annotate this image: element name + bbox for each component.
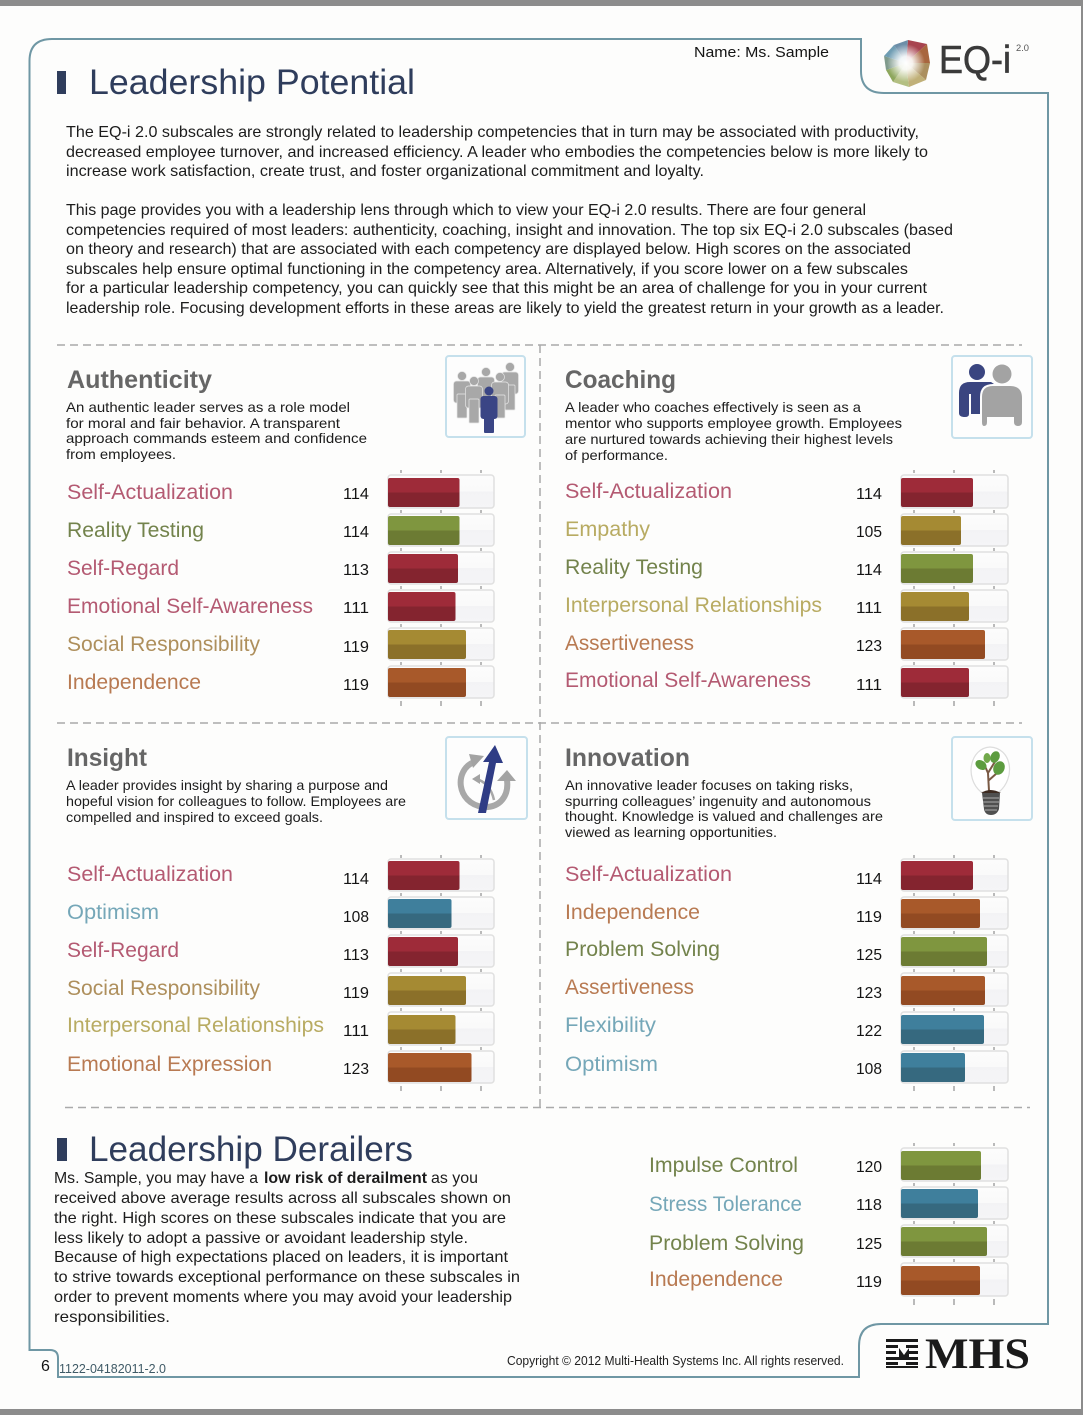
row: Emotional Self-Awareness 111: Emotional Self-Awareness (67, 595, 313, 618)
panel: Innovation (565, 737, 1032, 1091)
row: Emotional Self-Awareness 111 (67, 586, 494, 622)
row: Assertiveness 123: Assertiveness (565, 632, 694, 655)
row: Social Responsibility 119 (67, 969, 494, 1006)
row: Self-Actualization 114 (565, 470, 1008, 508)
row: Interpersonal Relationships 111: Interpersonal Relationships (565, 594, 822, 617)
intro paragraph 2: on theory and research) that are associated with each competency are displayed below. High scores on the associated (66, 241, 911, 258)
row: Emotional Self-Awareness 111: Emotional Self-Awareness (565, 669, 811, 692)
row: Optimism 108 (565, 1047, 1008, 1091)
panel: Coaching (565, 356, 1032, 706)
description: Coaching: A leader who coaches effectively is seen as a (565, 399, 861, 415)
description: Insight (66, 777, 406, 825)
row: Self-Actualization 114 (565, 855, 1008, 891)
row: Social Responsibility 119 (67, 624, 494, 660)
row: Stress Tolerance 118 (649, 1183, 1008, 1219)
row: Problem Solving 125: 125 (856, 1236, 882, 1253)
logo: EQ-i 2.0 (884, 39, 1029, 87)
row: Problem Solving 125: 125 (856, 947, 882, 964)
row: Social Responsibility 119: Social Responsibility (67, 977, 260, 1000)
row: Emotional Self-Awareness 111 (565, 662, 1008, 706)
intro paragraph 1 (66, 124, 928, 180)
row: Stress Tolerance 118: 118 (856, 1197, 882, 1214)
row: Independence 119: 119 (856, 1274, 882, 1291)
logo: EQ-i 2.0: EQ-i (939, 39, 1011, 82)
row: Assertiveness 123 (565, 969, 1008, 1006)
description: Coaching: are nurtured towards achieving their highest levels (565, 431, 893, 447)
row: Problem Solving 125 (565, 931, 1008, 967)
row: Self-Actualization 114: 114 (343, 486, 369, 503)
derailers text block: the right. High scores on these subscales indicate that you are (54, 1210, 506, 1227)
row: Empathy 105: 105 (856, 524, 882, 541)
derailers text block: responsibilities. (54, 1309, 170, 1326)
row: Problem Solving 125 (649, 1221, 1008, 1257)
row: Impulse Control 120 (649, 1143, 1008, 1181)
row: Problem Solving 125: Problem Solving (565, 938, 720, 961)
row: Flexibility 122: Flexibility (565, 1014, 657, 1037)
row: Social Responsibility 119: Social Responsibility (67, 633, 260, 656)
description: Innovation: viewed as learning opportunities. (565, 824, 777, 840)
row: Independence 119: 119 (343, 677, 369, 694)
derailers text block: as you (431, 1170, 478, 1187)
row: Impulse Control 120: 120 (856, 1159, 882, 1176)
row: Interpersonal Relationships 111 (565, 586, 1008, 622)
derailers text block: received above average results across all subscales shown on (54, 1190, 511, 1207)
row: Interpersonal Relationships 111: 111 (343, 1023, 369, 1040)
logo: MHS (886, 1331, 1030, 1378)
row: Assertiveness 123: 123 (856, 985, 882, 1002)
derailers text block: low risk of derailment (264, 1170, 428, 1187)
row: Flexibility 122: 122 (856, 1023, 882, 1040)
row: Self-Actualization 114 (67, 855, 494, 891)
description: Insight: compelled and inspired to exceed goals. (66, 809, 323, 825)
row: Self-Regard 113: Self-Regard (67, 939, 179, 962)
name: Name: Ms. Sample (694, 44, 829, 61)
icon: group with leader (446, 356, 525, 437)
row: Flexibility 122 (565, 1008, 1008, 1045)
row: Reality Testing 114 (67, 510, 494, 546)
icon: two people (952, 356, 1032, 438)
description: Innovation: spurring colleagues’ ingenuity and autonomous (565, 793, 871, 809)
row: Assertiveness 123: Assertiveness (565, 976, 694, 999)
row: Self-Regard 113 (67, 931, 494, 967)
description: Coaching: of performance. (565, 447, 668, 463)
description: Authenticity: approach commands esteem and confidence (66, 430, 367, 446)
row: Interpersonal Relationships 111: Interpersonal Relationships (67, 1014, 324, 1037)
intro paragraph 1: The EQ-i 2.0 subscales are strongly related to leadership competencies that in turn may be associated with productivity, (66, 124, 919, 141)
row: Impulse Control 120: Impulse Control (649, 1154, 798, 1177)
row: Self-Actualization 114: 114 (343, 871, 369, 888)
row: Reality Testing 114 (565, 548, 1008, 584)
panel: Authenticity (66, 356, 525, 706)
row: Emotional Expression 123: Emotional Expression (67, 1053, 272, 1076)
intro paragraph 1: increase work satisfaction, create trust, and foster organizational commitment and loyalty. (66, 163, 704, 180)
row: Self-Regard 113 (67, 548, 494, 584)
row: Self-Actualization 114: Self-Actualization (67, 863, 233, 886)
intro paragraph 2: competencies required of most leaders: authenticity, coaching, insight and innovation. The top six EQ-i 2.0 subscales (based (66, 222, 953, 239)
description: Innovation (565, 777, 883, 840)
row: Emotional Expression 123: 123 (343, 1061, 369, 1078)
row: Self-Actualization 114 (67, 470, 494, 508)
derailers text block (54, 1170, 520, 1326)
description: Coaching: mentor who supports employee growth. Employees (565, 415, 902, 431)
heading: Authenticity: Authenticity (67, 366, 212, 394)
row: Emotional Self-Awareness 111: 111 (856, 677, 882, 694)
logo: EQ-i 2.0: 2.0 (1016, 43, 1029, 53)
row: Reality Testing 114: 114 (343, 524, 369, 541)
page number: 6 (41, 1358, 50, 1375)
derailers text block: Because of high expectations placed on leaders, it is important (54, 1249, 509, 1266)
row: Reality Testing 114: Reality Testing (67, 519, 204, 542)
description: Insight: hopeful vision for colleagues to follow. Employees are (66, 793, 406, 809)
row: Independence 119: Independence (649, 1268, 783, 1291)
title: Leadership Potential: Leadership Potential (89, 63, 415, 102)
row: Assertiveness 123: 123 (856, 638, 882, 655)
description: Authenticity (66, 399, 367, 462)
description: Innovation: An innovative leader focuses on taking risks, (565, 777, 853, 793)
logo: MHS: MHS (925, 1331, 1030, 1378)
panel: Insight (66, 737, 527, 1091)
row: Independence 119: Independence (67, 671, 201, 694)
icon: arrows (446, 737, 527, 819)
row: Empathy 105 (565, 510, 1008, 546)
description: Innovation: thought. Knowledge is valued and challenges are (565, 808, 883, 824)
description: Authenticity: for moral and fair behavior. A transparent (66, 415, 340, 431)
row: Reality Testing 114: 114 (856, 562, 882, 579)
row: Optimism 108: Optimism (565, 1053, 658, 1076)
description: Insight: A leader provides insight by sharing a purpose and (66, 777, 388, 793)
row: Optimism 108: Optimism (67, 901, 159, 924)
intro paragraph 2: subscales help ensure optimal functioning in the competency area. Alternatively, if you score lower on a few subscales (66, 261, 908, 278)
row: Self-Actualization 114: Self-Actualization (565, 480, 732, 503)
intro paragraph 2 (66, 202, 953, 317)
row: Self-Regard 113: Self-Regard (67, 557, 179, 580)
heading: Innovation: Innovation (565, 744, 690, 772)
description: Coaching (565, 399, 902, 463)
row: Independence 119: 119 (856, 909, 882, 926)
intro paragraph 2: for a particular leadership competency, you can quickly see that this might be an area of challenge for you in your current (66, 280, 928, 297)
icon: light bulb with plant (952, 737, 1032, 820)
row: Problem Solving 125: Problem Solving (649, 1232, 804, 1255)
derailers text block: less likely to adopt a passive or avoidant leadership style. (54, 1230, 468, 1247)
row: Optimism 108: 108 (343, 909, 369, 926)
heading: Coaching: Coaching (565, 366, 676, 394)
row: Interpersonal Relationships 111: 111 (856, 600, 882, 617)
derailers text block: order to prevent moments where you may avoid your leadership (54, 1289, 512, 1306)
row: Social Responsibility 119: 119 (343, 985, 369, 1002)
row: Self-Actualization 114: 114 (856, 486, 882, 503)
row: Independence 119: Independence (565, 901, 700, 924)
row: Independence 119 (67, 662, 494, 706)
description: Authenticity: from employees. (66, 446, 176, 462)
copyright: Copyright © 2012 Multi-Health Systems Inc. All rights reserved. (507, 1354, 844, 1368)
row: Social Responsibility 119: 119 (343, 639, 369, 656)
row: Optimism 108 (67, 893, 494, 929)
derailers text block: Ms. Sample, you may have a (54, 1170, 258, 1187)
panel: Leadership Derailers (54, 1130, 1008, 1326)
row: Interpersonal Relationships 111 (67, 1008, 494, 1045)
row: Self-Regard 113: 113 (343, 947, 369, 964)
document code: 1122-04182011-2.0 (59, 1362, 166, 1376)
row: Self-Actualization 114: 114 (856, 871, 882, 888)
row: Reality Testing 114: Reality Testing (565, 556, 703, 579)
row: Emotional Self-Awareness 111: 111 (343, 600, 369, 617)
row: Assertiveness 123 (565, 624, 1008, 660)
heading: Insight: Insight (67, 744, 148, 772)
intro paragraph 2: This page provides you with a leadership lens through which to view your EQ-i 2.0 results. There are four general (66, 202, 866, 219)
description: Authenticity: An authentic leader serves as a role model (66, 399, 350, 415)
row: Stress Tolerance 118: Stress Tolerance (649, 1193, 802, 1216)
derailers text block: to strive towards exceptional performance on these subscales in (54, 1269, 520, 1286)
row: Optimism 108: 108 (856, 1061, 882, 1078)
intro paragraph 1: decreased employee turnover, and increased efficiency. A leader who embodies the competencies below is more likely to (66, 144, 928, 161)
heading: Leadership Derailers: Leadership Derailers (89, 1130, 413, 1169)
intro paragraph 2: leadership role. Focusing development efforts in these areas are likely to yield the greatest return in your growth as a leader. (66, 300, 944, 317)
row: Self-Regard 113: 113 (343, 562, 369, 579)
row: Independence 119 (565, 893, 1008, 929)
row: Independence 119 (649, 1259, 1008, 1305)
row: Emotional Expression 123 (67, 1047, 494, 1091)
row: Empathy 105: Empathy (565, 518, 651, 541)
row: Self-Actualization 114: Self-Actualization (565, 863, 732, 886)
row: Self-Actualization 114: Self-Actualization (67, 481, 233, 504)
